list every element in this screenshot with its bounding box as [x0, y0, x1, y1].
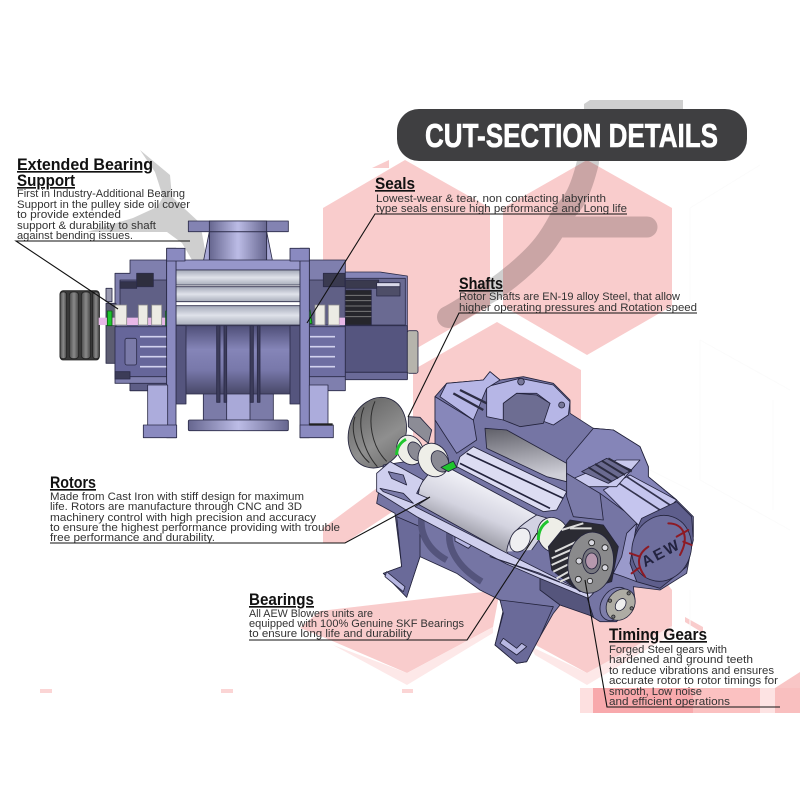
callout: rotors: Made from Cast Iron with stiff design for maximum — [50, 491, 304, 503]
callout: bearings — [249, 533, 537, 640]
right casing block — [567, 428, 677, 527]
callout: seals: type seals ensure high performance and Long life — [376, 203, 627, 215]
callout: extended bearing support: Support — [17, 172, 75, 190]
upper rotors section — [176, 260, 300, 325]
callout: timing gears: smooth, Low noise — [609, 686, 702, 698]
title banner — [397, 109, 747, 161]
callout: timing gears: Forged Steel gears with — [609, 644, 727, 656]
pulley — [60, 291, 99, 360]
callout: rotors: machinery control with high precision and accuracy — [50, 512, 316, 524]
callout: rotors — [50, 474, 430, 544]
right end housing — [301, 260, 418, 391]
callout: timing gears — [585, 580, 780, 708]
callout: shafts: Shafts — [459, 275, 503, 293]
upper rotor bore — [485, 428, 567, 482]
callout: bearings: equipped with 100% Genuine SKF Bearings — [249, 618, 464, 630]
right support foot — [290, 248, 333, 438]
bearings and seals — [392, 431, 457, 482]
left end housing — [106, 260, 168, 391]
callout: bearings: All AEW Blowers units are — [249, 608, 373, 620]
callout: bearings: to ensure long life and durability — [249, 628, 412, 640]
callout: timing gears: hardened and ground teeth — [609, 654, 753, 666]
callout: extended bearing support: against bending issues. — [17, 230, 133, 242]
main rotor — [417, 468, 537, 553]
title text: CUT-SECTION DETAILS — [425, 117, 718, 154]
callout: timing gears: and efficient operations — [609, 696, 730, 708]
callout: timing gears: Timing Gears — [609, 626, 707, 644]
callout: rotors: Rotors — [50, 474, 96, 492]
watermark: grey stylised mark — [87, 100, 683, 317]
callout: shafts — [408, 275, 697, 417]
callout: timing gears: accurate rotor to rotor timings for — [609, 675, 778, 687]
callout: extended bearing support: to provide extended — [17, 209, 121, 221]
callout: shafts: higher operating pressures and Rotation speed — [459, 302, 697, 314]
callout: extended bearing support: Extended Bearing — [17, 156, 153, 174]
pump: side cross-section view — [60, 221, 418, 438]
pulley — [339, 390, 432, 476]
callout: seals: Lowest-wear & tear, non contacting labyrinth — [376, 193, 606, 205]
callout: extended bearing support: Support in the pulley side oil cover — [17, 199, 190, 211]
casing silhouette — [377, 372, 693, 663]
callout: seals: Seals — [375, 175, 415, 193]
rotor two — [457, 447, 567, 512]
rear bore ring and bearing — [506, 512, 575, 558]
end cover with AEW logo: AEW — [639, 537, 683, 571]
AEW logo arcs — [630, 523, 692, 577]
callout: extended bearing support — [16, 156, 190, 309]
callout: extended bearing support: support & durability to shaft — [17, 220, 157, 232]
callout: timing gears: to reduce vibrations and ensures — [609, 665, 774, 677]
lower casing — [176, 326, 300, 431]
left support foot — [143, 248, 185, 438]
timing gear — [548, 520, 618, 596]
legs and lower lobes — [383, 517, 593, 663]
background: pink hexagon pattern — [40, 160, 800, 713]
callout: seals — [307, 175, 627, 323]
callout: bearings: Bearings — [249, 591, 314, 609]
callout: rotors: life. Rotors are manufacture through CNC and 3D — [50, 501, 302, 513]
shaft and left bearings — [99, 305, 177, 326]
callout: rotors: free performance and durability. — [50, 532, 215, 544]
callout: rotors: to ensure the highest performance providing with trouble — [50, 522, 340, 534]
callout: shafts: Rotor Shafts are EN-19 alloy Steel, that allow — [459, 291, 681, 303]
pump: isometric cut-away view — [339, 372, 701, 663]
upper inlet neck and flange — [188, 221, 288, 270]
callout: extended bearing support: First in Industry-Additional Bearing — [17, 188, 185, 200]
lower right flange — [594, 582, 641, 626]
end cover with AEW logo — [613, 502, 701, 590]
top flange — [435, 372, 570, 453]
cross-section plate along front edge — [377, 462, 593, 598]
